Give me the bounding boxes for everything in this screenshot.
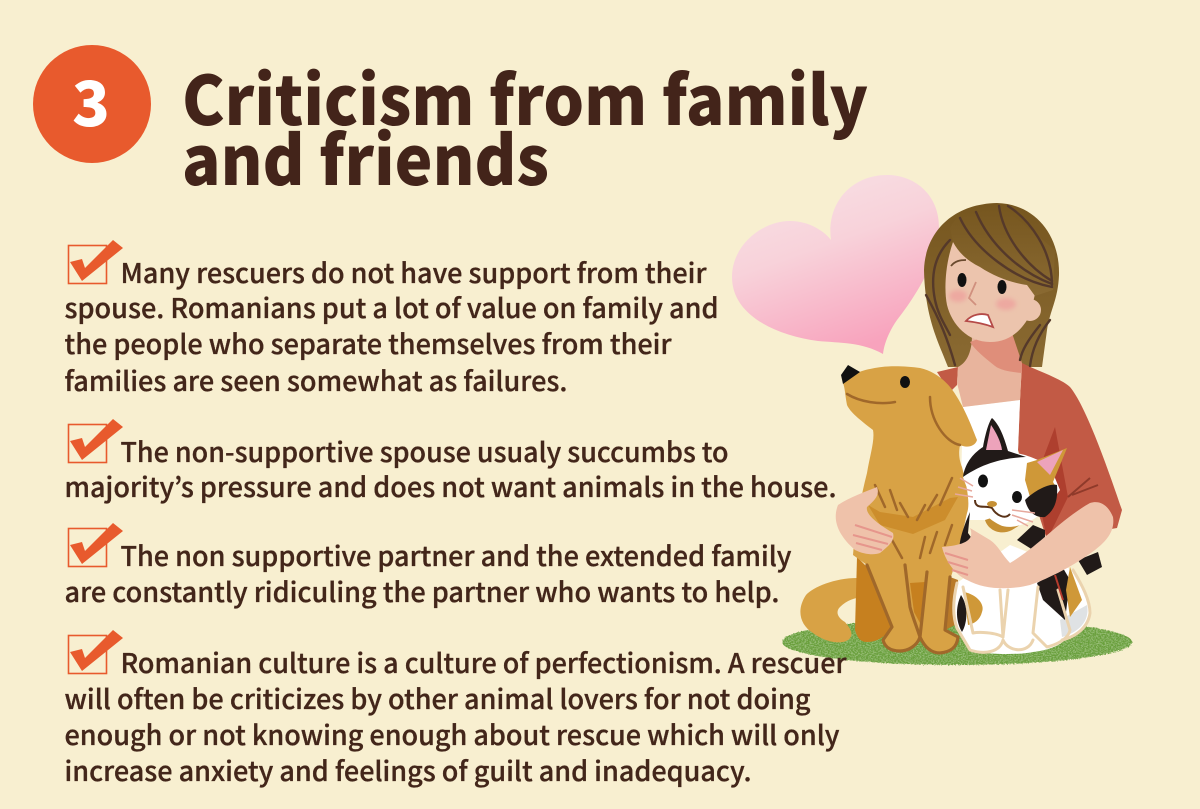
title: and friends: [182, 106, 549, 205]
item 2: The non-supportive spouse usualy succumbs to: [120, 431, 728, 470]
item 1: families are seen somewhat as failures.: [64, 360, 568, 399]
item 3: [64, 523, 792, 610]
item 1: [64, 240, 718, 399]
item 2: majority’s pressure and does not want animals in the house.: [64, 466, 837, 505]
woman: [924, 203, 1122, 540]
number badge: [33, 45, 151, 163]
woman's arms: [836, 478, 1113, 588]
cat: [954, 418, 1102, 654]
item 4: increase anxiety and feelings of guilt and inadequacy.: [64, 750, 752, 789]
number badge: 3: [72, 54, 110, 144]
item 4: Romanian culture is a culture of perfectionism. A rescuer: [120, 642, 847, 681]
item 2: [64, 419, 837, 505]
dog: [800, 365, 977, 653]
item 1: Many rescuers do not have support from their: [120, 252, 707, 291]
grass: [782, 619, 1132, 665]
item 1: the people who separate themselves from their: [64, 323, 672, 362]
item 1: spouse. Romanians put a lot of value on family and: [64, 287, 718, 326]
title: Criticism from family: [182, 46, 868, 145]
heart: [732, 175, 939, 354]
illustration: woman hugging dog and cat: [732, 175, 1132, 665]
item 3: The non supportive partner and the extended family: [120, 535, 792, 574]
item 4: enough or not knowing enough about rescue which will only: [64, 714, 840, 753]
item 3: are constantly ridiculing the partner who wants to help.: [64, 571, 780, 610]
item 4: will often be criticizes by other animal lovers for not doing: [64, 678, 811, 717]
checklist: [64, 240, 847, 789]
item 4: [64, 630, 847, 789]
title: [182, 46, 868, 205]
